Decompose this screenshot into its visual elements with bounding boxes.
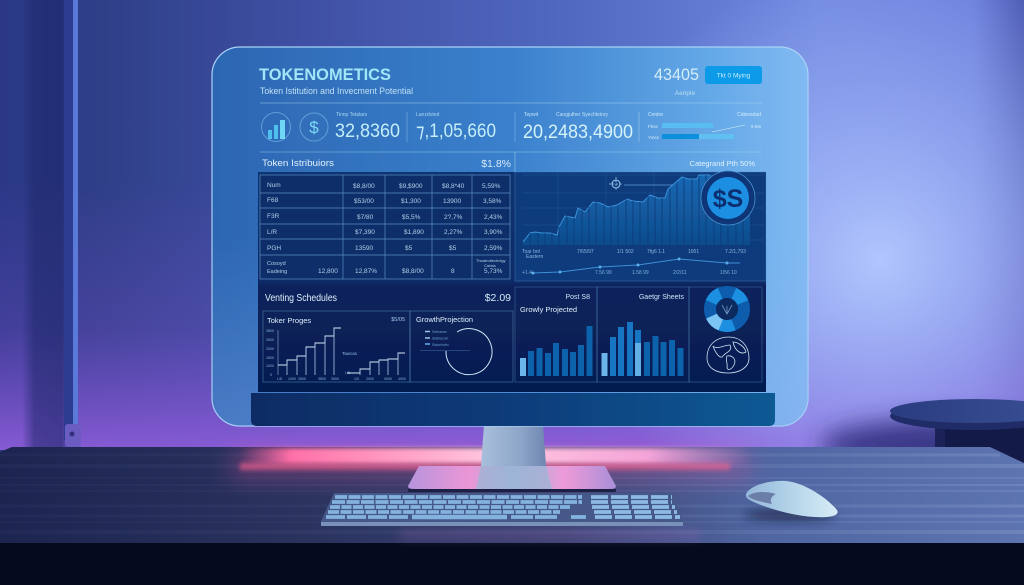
monitor screen (212, 47, 808, 426)
token distribution table: 12,800 (318, 268, 338, 275)
mini progress bars: Fbss (648, 124, 659, 129)
stat: total: Tinnp Tetalars (336, 112, 368, 118)
mini progress bars: Centre (648, 112, 663, 118)
glass monitor panel (212, 47, 808, 426)
token distribution table: $8,8*40 (442, 183, 465, 190)
token distribution table: 5,59% (482, 183, 501, 190)
token distribution table: 2,43% (484, 214, 503, 221)
pink underglow (230, 448, 750, 539)
stat: launched (416, 112, 496, 142)
side table (890, 399, 1024, 465)
panel: token progress: 2000 (366, 377, 374, 381)
panel: token progress: 1500 (266, 356, 274, 360)
mini progress bars: Yinss (648, 135, 660, 140)
icon: bar chart (262, 112, 290, 142)
stat: launched: Lanzdoted (416, 112, 440, 118)
panel: token progress: L/D (345, 371, 351, 375)
panel: growth projection: GrowthProjection (416, 315, 473, 324)
value: distribution: $1.8% (481, 158, 511, 170)
token distribution table: PGH (267, 245, 281, 252)
panel: token progress: L/D (277, 377, 283, 381)
dashboard dark screen (258, 172, 766, 392)
stat: launched: ⁊,1,05,660 (416, 121, 496, 142)
token distribution table: $1,300 (401, 198, 421, 205)
token distribution table: Thnatroltechnigy (476, 258, 506, 263)
panel: growth projection: Stablecoin (432, 336, 448, 340)
area bar chart (522, 172, 764, 260)
mini progress bars: 9 Bis (751, 124, 762, 129)
icon: dollar: $ (309, 118, 319, 137)
stat: total (335, 112, 400, 142)
stat: target: 20,2483,4900 (523, 122, 633, 143)
line chart: +1.4 (522, 270, 532, 276)
panel: vesting schedules heading: Venting Schedules (265, 293, 337, 304)
panel: growth projection (410, 311, 513, 382)
panel: token progress: 1000 (288, 377, 296, 381)
heading: category: Categrand Pth 50% (690, 159, 755, 168)
token distribution table: $9,$900 (399, 183, 423, 190)
stat: target: Tepwit (524, 112, 539, 118)
button (705, 66, 762, 84)
mouse (744, 481, 838, 521)
chart marker icon (609, 177, 673, 191)
panel: growth projected bars (515, 287, 597, 382)
panel: token progress: 0 (270, 373, 272, 377)
icon: dollar (300, 113, 328, 141)
mini progress bars (648, 112, 762, 140)
area bar chart: 7/65/97 (577, 249, 594, 255)
panel: token progress: Tawcas (342, 351, 358, 356)
coin icon (701, 171, 755, 225)
area bar chart: 7.2/1,793 (725, 249, 746, 255)
token distribution table: 3,90% (484, 229, 503, 236)
panel: gauge sheets bars (597, 287, 689, 382)
token distribution table: 12,87% (355, 268, 377, 275)
line chart: 1.58 99 (632, 270, 649, 276)
token distribution table: F68 (267, 197, 279, 204)
area bar chart: Eastern (526, 254, 543, 260)
line chart: 2/2/11 (673, 270, 687, 276)
line chart (515, 172, 766, 281)
desk (0, 447, 1024, 585)
token distribution table: $7,390 (355, 229, 375, 236)
panel: token progress: 3000 (384, 377, 392, 381)
panel: growth projected bars: Growly Projected (520, 305, 577, 314)
token distribution table: $5 (405, 245, 413, 252)
token distribution table: $5,5% (402, 214, 421, 221)
line chart: 1/56 10 (720, 270, 737, 276)
token distribution table: L/R (267, 229, 277, 236)
globe icon (707, 337, 749, 373)
token distribution table: 8 (451, 268, 455, 275)
panel: token progress (263, 311, 410, 382)
panel: vesting schedules heading: $2.09 (485, 292, 511, 304)
stat: target: Cangjuther Syechtstory (556, 112, 608, 118)
donut chart (710, 292, 744, 326)
stat: total: 32,8360 (335, 121, 400, 142)
token distribution table: F3R (267, 213, 280, 220)
token distribution table: 3,58% (483, 198, 502, 205)
token distribution table (260, 175, 510, 279)
token distribution table: $7/80 (357, 214, 374, 221)
area bar chart: 7fg6 1.1 (647, 249, 665, 255)
token distribution table: 2,27% (444, 229, 463, 236)
panel: growth projection: Seteanes (432, 330, 447, 334)
token distribution table: $53/00 (354, 198, 374, 205)
token distribution table: $8,8/00 (353, 183, 375, 190)
token distribution table: Cartas (484, 263, 496, 268)
token distribution table: 2,59% (484, 245, 503, 252)
stat: target (523, 112, 633, 143)
header value: 43405 (654, 65, 699, 84)
panel: token progress: 4000 (398, 377, 406, 381)
panel: token progress: 2500 (266, 338, 274, 342)
panel: gauge sheets bars: Gaetgr Sheets (639, 294, 684, 301)
token distribution table: Num (267, 182, 281, 189)
panel: growth projection: Stakeholm (432, 343, 449, 347)
button: Tkt 0 Mying (717, 72, 751, 80)
panel: token progress: 2000 (266, 347, 274, 351)
panel: vesting schedules heading (265, 292, 511, 304)
monitor bezel (251, 393, 775, 426)
wall pipe (64, 0, 81, 447)
panel: token progress: 2500 (298, 377, 306, 381)
line chart: 7.56 99 (595, 270, 612, 276)
token distribution table: $5 (449, 245, 457, 252)
token distribution table: 2?,7% (444, 214, 463, 221)
keyboard (321, 493, 683, 526)
title: TOKENOMETICS (259, 65, 391, 84)
token distribution table: $8,8/00 (402, 268, 424, 275)
subtitle: Token Istitution and Invecment Potential (260, 86, 413, 96)
panel: side widgets (689, 287, 762, 382)
token distribution table: 13590 (355, 245, 373, 252)
token distribution table: Eadeing (267, 269, 287, 275)
token distribution table: 13900 (443, 198, 461, 205)
token distribution table: Cosoyd (267, 261, 286, 267)
panel: token progress: 3800 (266, 329, 274, 333)
monitor stand (408, 424, 616, 492)
heading: token distributors: Token Istribuiors (262, 158, 334, 169)
coin icon: $S (713, 185, 743, 213)
area bar chart: 1/1 502 (617, 249, 634, 255)
panel: token progress: Toker Proges (267, 316, 311, 325)
panel: token progress: 1/0 (354, 377, 359, 381)
panel: token progress: 3000 (331, 377, 339, 381)
token distribution table: 5,73% (484, 268, 503, 275)
mini progress bars: Cidensdad (737, 112, 761, 118)
panel: token progress: 1000 (266, 364, 274, 368)
panel: token progress: $5/05 (391, 317, 405, 323)
token distribution table: $1,890 (404, 229, 424, 236)
area bar chart: 1001 (688, 249, 699, 255)
header caption: Aeriple (675, 90, 696, 97)
panel: token progress: 3500 (318, 377, 326, 381)
area bar chart: Toar bnl (522, 249, 540, 255)
panel: growth projected bars: Post S8 (565, 294, 590, 301)
